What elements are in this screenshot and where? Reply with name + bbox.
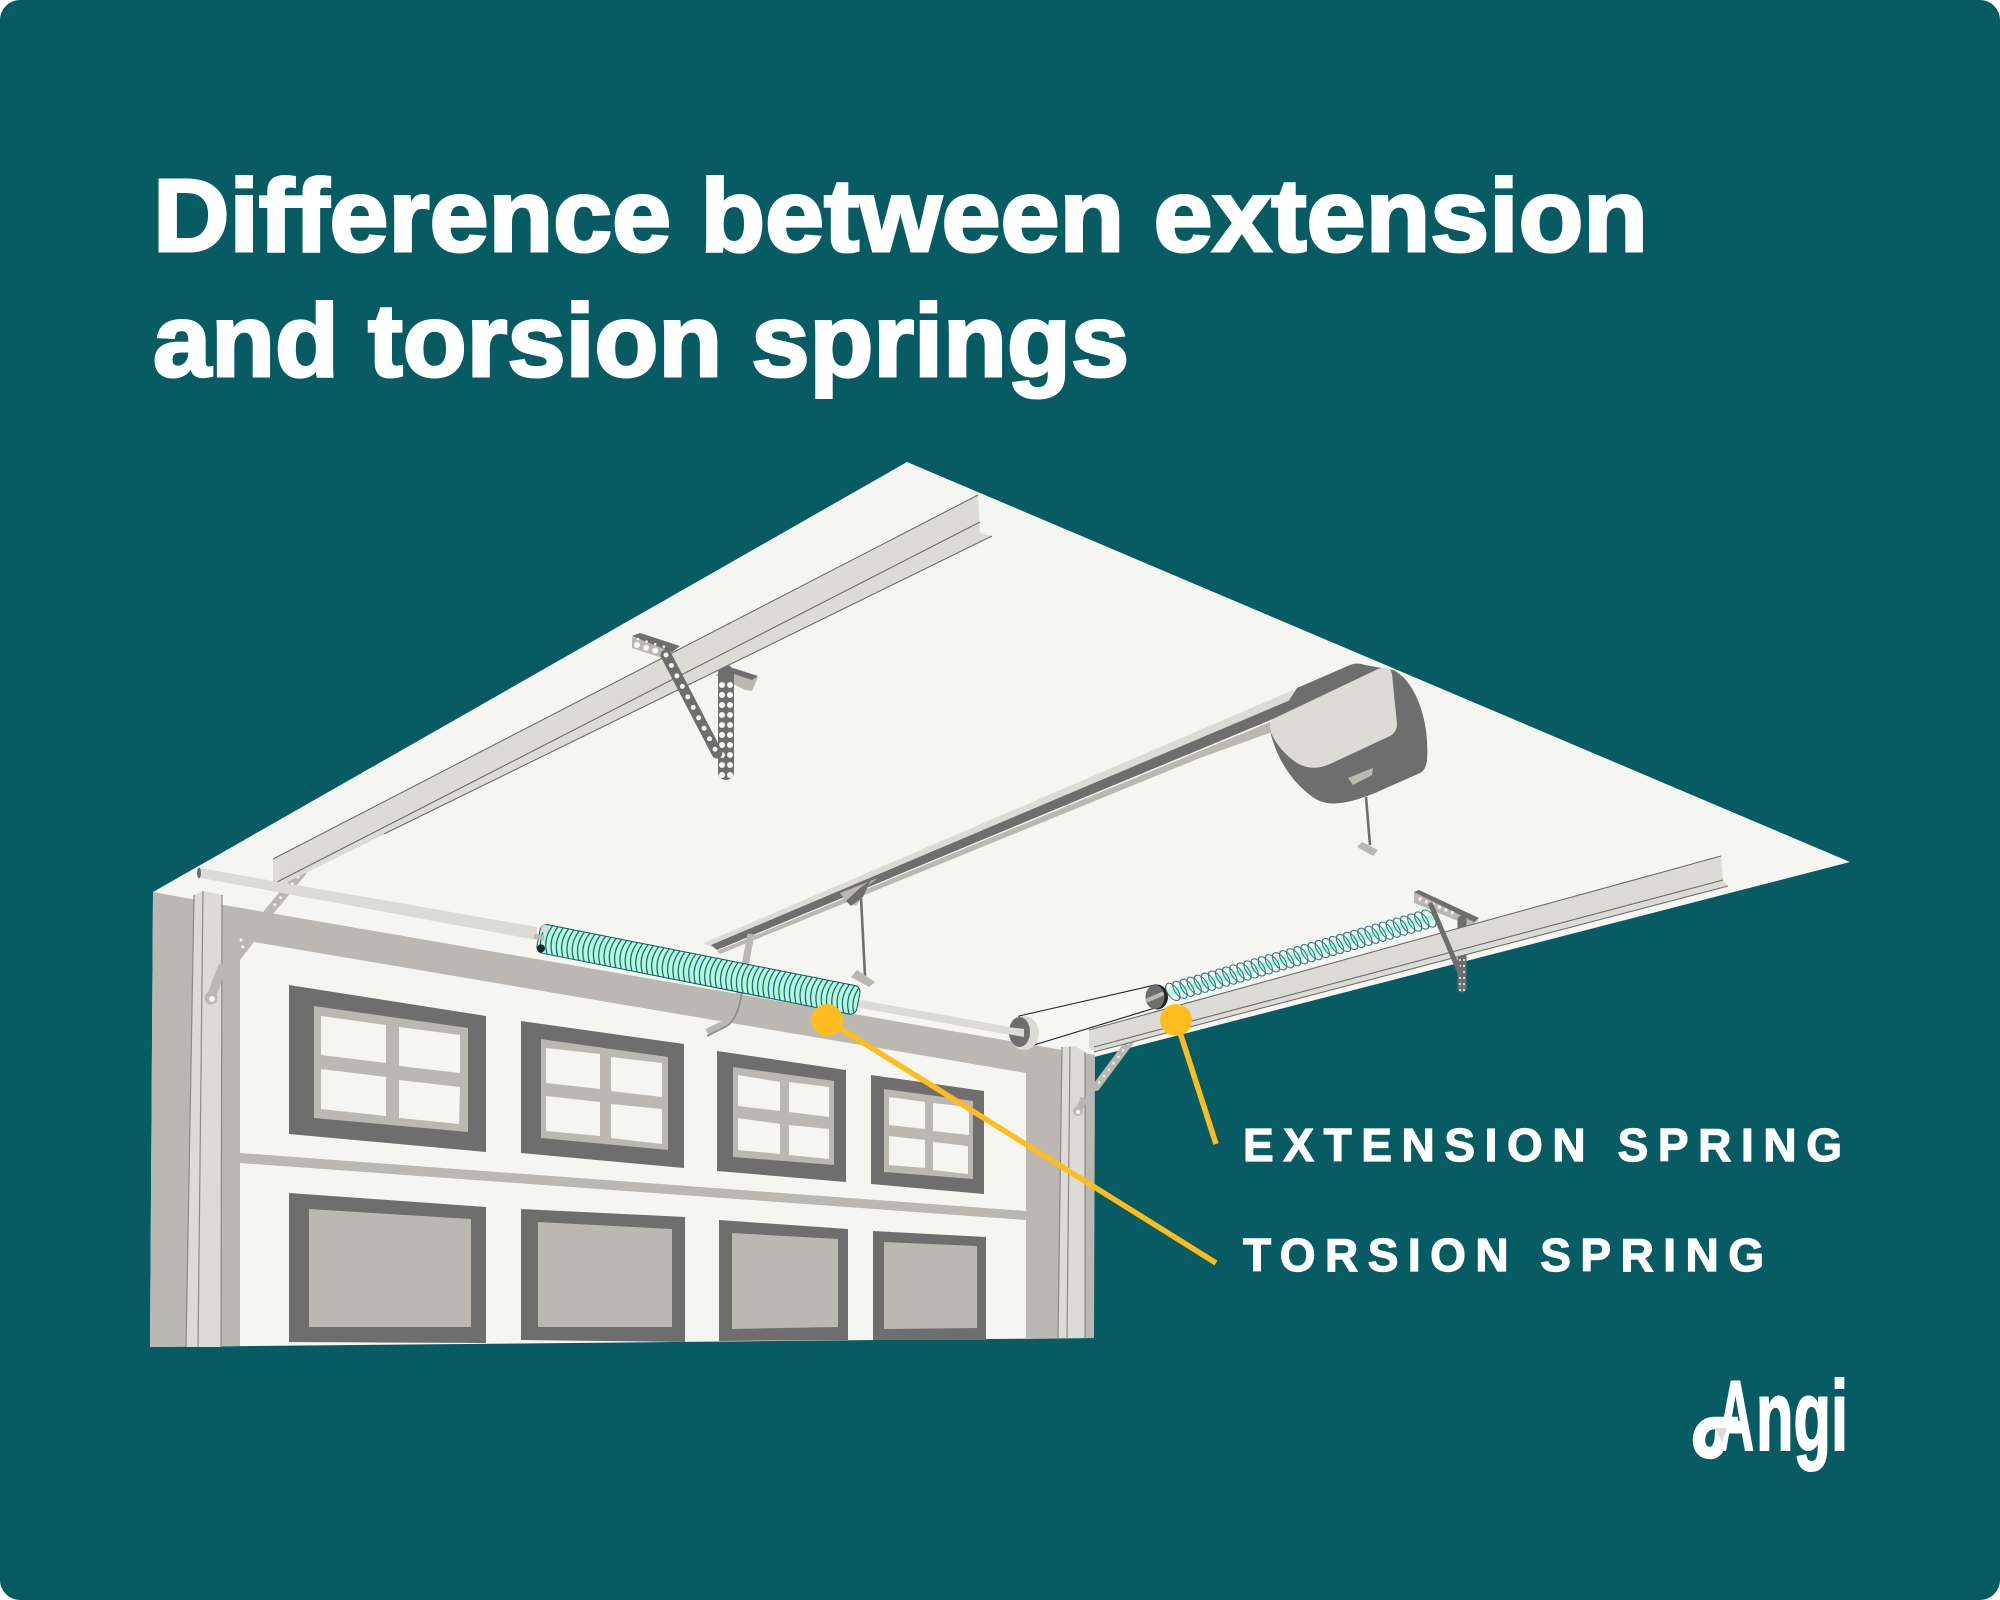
title: Difference between extension bbox=[153, 158, 1648, 273]
upper window 1 bbox=[289, 985, 486, 1152]
torsion spring bbox=[531, 922, 862, 1016]
torsion spring callout bbox=[811, 1004, 1216, 1263]
right vertical door track bbox=[1058, 1046, 1085, 1338]
rail hanger with cord bbox=[840, 878, 878, 987]
Angi logo: ngi bbox=[1756, 1360, 1848, 1471]
left ceiling track bbox=[273, 495, 992, 887]
Angi logo: A bbox=[1717, 1360, 1754, 1471]
left vertical door track bbox=[186, 891, 222, 1347]
right jamb brackets bbox=[1073, 1040, 1131, 1116]
lower panel 1 bbox=[289, 1193, 486, 1343]
left ceiling bracket back parts bbox=[632, 633, 758, 778]
opener rail bbox=[704, 690, 1300, 954]
lower panel 4 bbox=[873, 1231, 986, 1340]
door frame and walls bbox=[150, 892, 1095, 1347]
Angi logo bbox=[1699, 1360, 1848, 1471]
upper window 4 bbox=[871, 1075, 984, 1194]
label: extension spring: EXTENSION SPRING bbox=[1243, 1119, 1842, 1171]
right ceiling bracket diagonal strap bbox=[1431, 905, 1460, 973]
left ceiling bracket diagonal strap bbox=[666, 655, 717, 753]
right ceiling bracket back parts bbox=[1414, 890, 1479, 992]
title bbox=[153, 158, 1648, 398]
extension spring callout bbox=[1160, 1004, 1216, 1144]
left jamb brackets bbox=[204, 872, 302, 1004]
lower panel 2 bbox=[521, 1209, 685, 1342]
title: and torsion springs bbox=[153, 283, 1129, 398]
right ceiling track bbox=[1089, 856, 1728, 1052]
J strap behind spring bbox=[707, 934, 751, 1036]
upper window 3 bbox=[717, 1051, 846, 1182]
lower panel 3 bbox=[719, 1220, 848, 1341]
garage ceiling and door surface bbox=[150, 462, 1850, 1347]
cylinder pulley bbox=[1008, 984, 1168, 1050]
upper window 2 bbox=[521, 1021, 684, 1168]
torsion shaft bbox=[197, 868, 1016, 1036]
label: torsion spring: TORSION SPRING bbox=[1243, 1229, 1764, 1281]
extension spring bbox=[1163, 908, 1440, 1002]
garage door opener bbox=[1270, 664, 1427, 856]
door middle rail bbox=[240, 1153, 1026, 1220]
